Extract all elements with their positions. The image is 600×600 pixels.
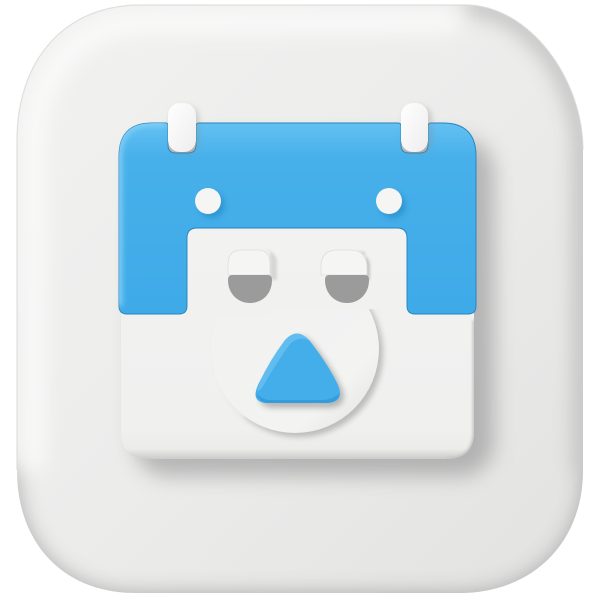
- right grey eye: [321, 250, 370, 303]
- calendar: [119, 103, 476, 459]
- right eye dot: [376, 188, 406, 218]
- blue triangle nose: [256, 334, 344, 408]
- left grey eye: [228, 250, 277, 303]
- left binder tab: [168, 103, 199, 154]
- blue calendar header: [119, 123, 476, 314]
- round muzzle: [242, 309, 386, 440]
- lower white calendar panel: [121, 228, 474, 459]
- calendar drop shadow: [134, 138, 494, 476]
- right binder tab: [401, 103, 432, 154]
- left eye dot: [195, 188, 225, 218]
